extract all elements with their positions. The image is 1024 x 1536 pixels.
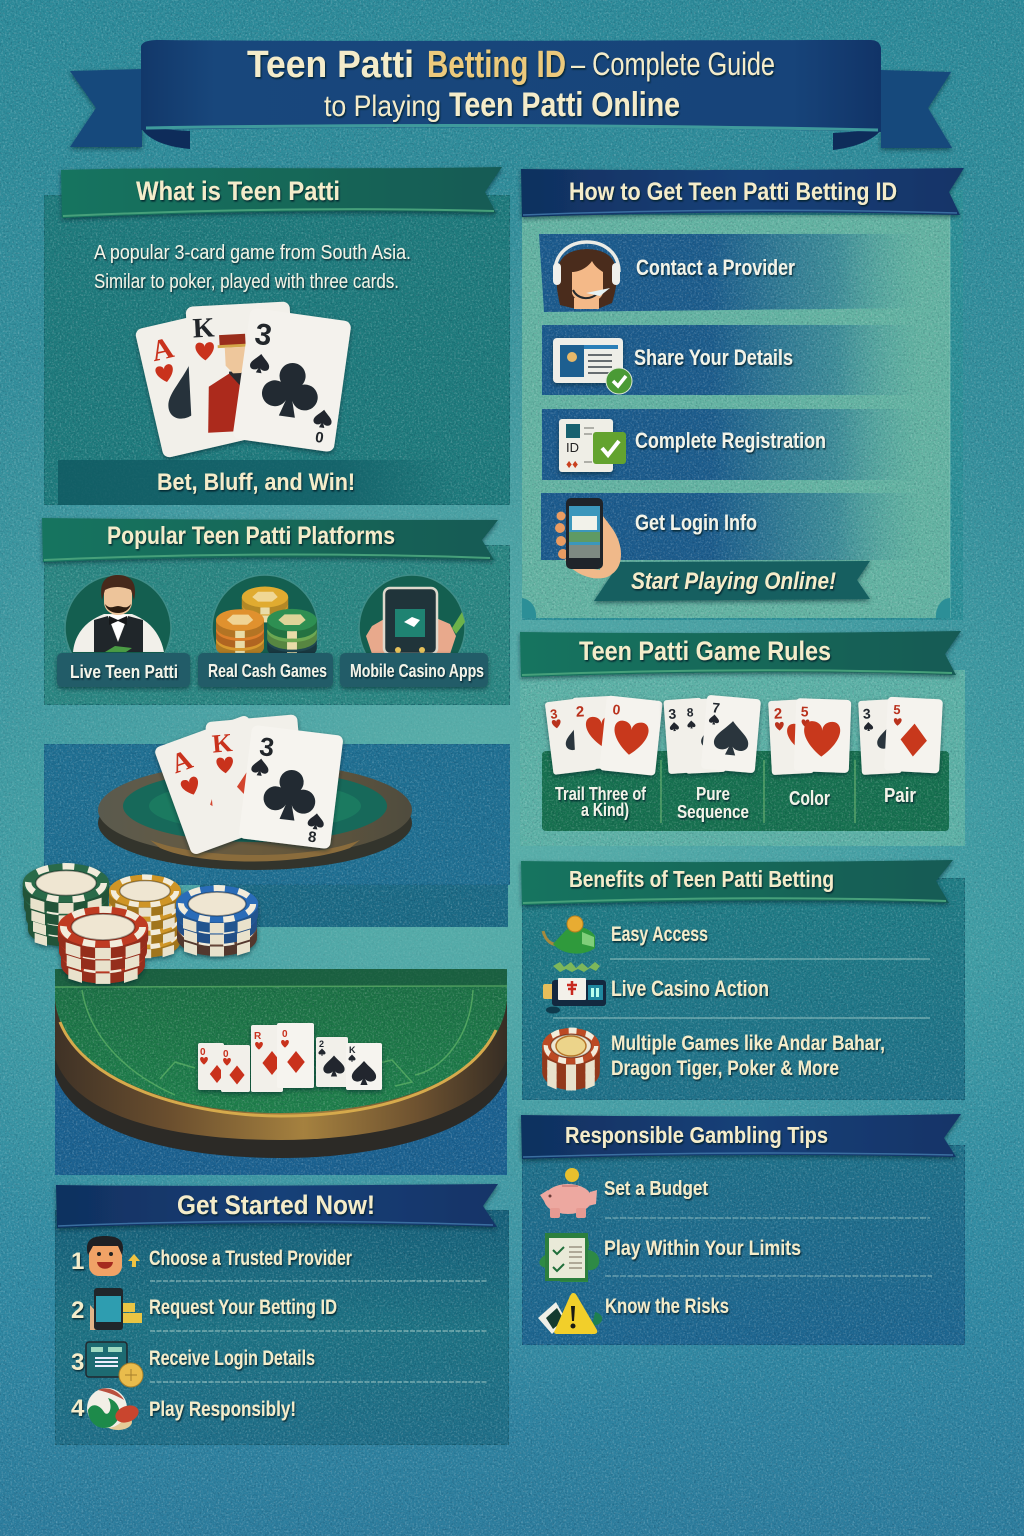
platform: real cash games — [198, 575, 333, 687]
step row: get login info — [541, 493, 920, 560]
slogan band — [58, 460, 458, 505]
pure sequence cards: 7 — [711, 699, 721, 716]
step row: get login info: Get Login Info — [635, 510, 757, 535]
benefit: easy access: Easy Access — [611, 923, 708, 946]
panel background — [522, 878, 965, 1100]
left ribbon tail — [70, 69, 142, 147]
heading ribbon — [521, 860, 953, 905]
icon: smiling face — [87, 1236, 140, 1276]
title text: – Complete Guide — [571, 46, 775, 82]
rule: trail — [545, 695, 663, 820]
heading ribbon: Teen Patti Game Rules — [579, 636, 831, 666]
trail label: a Kind) — [581, 800, 629, 820]
heading ribbon — [61, 167, 502, 218]
step 4: Play Responsibly! — [149, 1398, 296, 1421]
platform: live teen patti — [57, 575, 190, 687]
step 3: Receive Login Details — [149, 1347, 315, 1370]
tip: set a budget: Set a Budget — [604, 1178, 708, 1200]
right ribbon tail — [881, 70, 952, 148]
benefit: live casino action: Live Casino Action — [611, 976, 769, 1001]
platform: mobile casino apps — [340, 575, 488, 687]
ribbon lower trim — [146, 126, 878, 130]
panel background — [55, 1210, 509, 1445]
row dividers — [150, 1281, 488, 1382]
pure sequence cards: 3 — [668, 705, 677, 722]
panel: benefits — [521, 860, 965, 1100]
icon: phone and tickets — [90, 1288, 142, 1330]
label: Mobile Casino Apps — [350, 661, 484, 681]
step row: contact a provider: Contact a Provider — [636, 255, 795, 280]
rule: color — [768, 698, 851, 810]
icon: support agent — [553, 242, 620, 309]
banner: start playing online: Start Playing Online! — [631, 568, 836, 595]
casino table — [55, 969, 507, 1158]
table cards: 3 — [258, 731, 276, 763]
playing cards on table: K — [349, 1045, 356, 1055]
label: Real Cash Games — [208, 661, 327, 681]
playing cards on table: R — [254, 1031, 262, 1042]
illustration: card table with chips — [23, 714, 510, 1175]
icon: chip stack — [542, 1028, 600, 1090]
benefit: easy access — [543, 916, 708, 972]
tip: know the risks — [538, 1293, 729, 1334]
label: Live Teen Patti — [70, 662, 178, 682]
multiple games text — [611, 1032, 885, 1080]
tip: know the risks: Know the Risks — [605, 1295, 729, 1318]
yellow chips — [109, 875, 181, 958]
playing cards on table — [198, 1023, 382, 1092]
panel: popular platforms — [42, 518, 510, 705]
heading ribbon — [521, 1114, 961, 1159]
color cards: 2 — [773, 705, 783, 723]
pure sequence label — [677, 784, 749, 822]
title text: Teen Patti Online — [449, 86, 680, 124]
step 1: 1 — [71, 1248, 84, 1275]
step 3: 3 — [71, 1349, 84, 1376]
table cards: K — [211, 728, 234, 759]
panel: responsible gambling tips — [521, 1114, 965, 1345]
playing cards on table: 2 — [319, 1039, 324, 1049]
icon: green device and coin — [543, 916, 600, 972]
lower panel — [55, 969, 507, 1175]
trail label: Trail Three of — [555, 784, 647, 804]
icon: piggy bank — [540, 1168, 597, 1218]
icon: green and red ball — [87, 1388, 141, 1430]
step 1 — [71, 1236, 352, 1276]
left ribbon fold — [141, 128, 190, 149]
three cards fan — [134, 301, 352, 459]
red chips — [58, 907, 148, 984]
icon: tablet and coin — [86, 1342, 143, 1387]
three cards fan: 0 — [314, 429, 325, 447]
icon: id card with check — [553, 338, 632, 394]
icon: hand holding phone — [555, 498, 621, 578]
row dividers — [605, 1218, 932, 1276]
title banner — [70, 40, 952, 150]
heading ribbon: Responsible Gambling Tips — [565, 1122, 828, 1148]
dealer icon — [65, 575, 171, 681]
chip stacks — [23, 864, 258, 984]
step 3 — [71, 1342, 315, 1387]
three cards fan: K — [192, 312, 216, 344]
oval table — [98, 763, 412, 870]
title text — [247, 44, 775, 124]
trail cards — [545, 695, 663, 776]
playing cards on table: 0 — [200, 1047, 206, 1058]
step row: contact a provider — [539, 234, 920, 312]
table cards: A — [167, 744, 198, 780]
panel: what is teen patti — [44, 167, 510, 505]
upper panel — [44, 744, 510, 885]
step 4: 4 — [71, 1395, 85, 1422]
panel background — [44, 545, 510, 705]
divider lines — [661, 760, 855, 823]
pair cards: 3 — [862, 705, 871, 722]
icon: form with check: ♦♦ — [566, 457, 578, 471]
row dividers — [553, 959, 930, 1018]
icon: live casino screens — [543, 978, 606, 1014]
title text: Teen Patti — [247, 44, 414, 86]
step 2 — [71, 1288, 337, 1330]
step 2: Request Your Betting ID — [149, 1296, 337, 1319]
heading ribbon: How to Get Teen Patti Betting ID — [569, 178, 897, 206]
pure sequence label: Pure — [696, 784, 730, 804]
description text: Similar to poker, played with three cards. — [94, 271, 399, 293]
panel background — [522, 190, 963, 620]
rule: pure sequence — [663, 695, 761, 822]
heading ribbon: Popular Teen Patti Platforms — [107, 522, 395, 550]
panel background — [522, 1145, 965, 1345]
panel background — [520, 670, 965, 846]
heading ribbon: What is Teen Patti — [136, 176, 340, 206]
table cards: 8 — [307, 829, 317, 846]
slogan band: Bet, Bluff, and Win! — [157, 469, 355, 496]
color cards: 5 — [801, 703, 809, 720]
icon: warning sign — [538, 1293, 602, 1334]
pair label: Pair — [884, 785, 916, 807]
pair cards: 5 — [893, 702, 901, 717]
pure sequence cards: 8 — [686, 705, 694, 720]
tip: play within limits: Play Within Your Limits — [604, 1237, 801, 1260]
trail cards: 0 — [612, 701, 621, 718]
banner: start playing online — [594, 561, 870, 601]
trail label — [555, 784, 647, 820]
multiple games text: Dragon Tiger, Poker & More — [611, 1057, 839, 1080]
label — [340, 653, 488, 687]
heading ribbon: Benefits of Teen Patti Betting — [569, 866, 834, 892]
dark band — [200, 885, 508, 927]
heading ribbon: Get Started Now! — [177, 1190, 375, 1220]
panel: how to get betting id — [521, 168, 964, 620]
step row: complete registration — [542, 409, 920, 480]
color label: Color — [789, 788, 830, 810]
tip: set a budget — [540, 1168, 708, 1218]
description text — [94, 242, 411, 293]
description text: A popular 3-card game from South Asia. — [94, 242, 411, 264]
icon: form with check — [559, 419, 626, 472]
step 2: 2 — [71, 1297, 84, 1324]
green chips — [23, 864, 109, 947]
felt band — [542, 751, 949, 831]
chips icon — [212, 575, 318, 681]
pure sequence cards — [663, 695, 761, 774]
playing cards on table: 0 — [282, 1029, 288, 1040]
heading ribbon — [56, 1184, 498, 1228]
title text: to Playing — [324, 90, 441, 123]
three cards fan: A — [148, 331, 177, 368]
pair cards — [858, 697, 943, 775]
heading ribbon — [520, 631, 961, 677]
step 1: Choose a Trusted Provider — [149, 1247, 352, 1270]
panel: get started now — [55, 1184, 509, 1445]
heading ribbon — [42, 518, 498, 562]
playing cards on table: 0 — [223, 1049, 229, 1060]
heading ribbon — [521, 168, 964, 217]
icon: checklist — [539, 1233, 599, 1282]
panel: game rules — [520, 631, 965, 846]
rule: pair — [858, 697, 943, 807]
icon: form with check: ID — [566, 440, 579, 455]
color cards — [768, 698, 851, 775]
table cards — [154, 714, 344, 856]
step row: share your details: Share Your Details — [634, 345, 793, 370]
pure sequence label: Sequence — [677, 802, 749, 822]
multiple games text: Multiple Games like Andar Bahar, — [611, 1032, 885, 1055]
step row: complete registration: Complete Registration — [635, 428, 826, 453]
panel background — [44, 195, 510, 505]
main ribbon body — [141, 40, 881, 132]
trail cards: 2 — [575, 703, 585, 721]
phone icon — [359, 575, 465, 681]
blue chips — [176, 885, 258, 956]
three cards fan: 3 — [253, 318, 274, 353]
trail cards: 3 — [549, 706, 558, 722]
benefit: multiple games — [542, 1028, 885, 1090]
step 4 — [71, 1388, 296, 1430]
tip: play within limits — [539, 1233, 801, 1282]
benefit: live casino action — [543, 976, 769, 1014]
step row: share your details — [542, 325, 920, 395]
right ribbon fold — [833, 130, 881, 150]
title text: Betting ID — [427, 44, 566, 86]
